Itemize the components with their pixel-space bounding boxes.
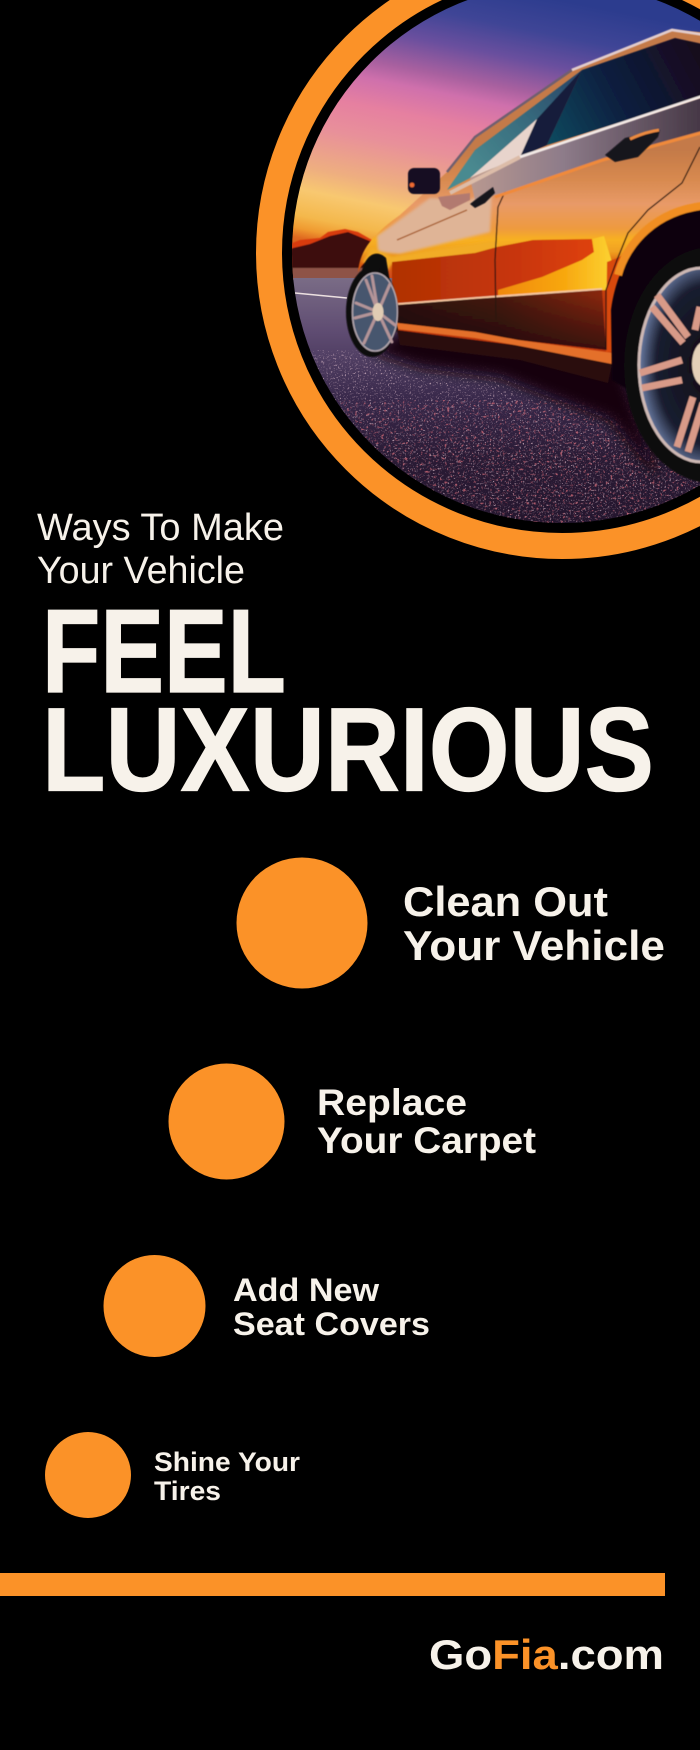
main title [42,585,654,816]
sky [280,0,700,280]
label 4: Shine Your [154,1447,301,1477]
photo: sports car at sunset [280,0,700,530]
label 2: Replace [317,1082,467,1123]
item 4: shine your tires [45,1432,301,1518]
sunset reflection red band [392,239,594,304]
rear wheel [611,205,700,483]
windows [447,30,700,193]
car body [358,30,700,410]
lower door panels [395,289,606,350]
door seams [494,195,504,316]
under-sill [397,330,612,383]
road line [295,293,347,298]
road [280,278,700,528]
intro heading: Ways To Make [37,507,284,549]
front wheel [346,254,398,357]
label 3: Add New [233,1272,379,1308]
yellow hood highlight [362,244,498,270]
label 3 [233,1272,430,1342]
circle 1 [236,858,368,988]
door handles [470,130,660,208]
hood sheen [377,190,492,254]
label 1 [403,878,665,969]
label 1: Your Vehicle [403,922,665,969]
label 2: Your Carpet [317,1120,536,1161]
footer bar [0,1573,665,1596]
upper panel [470,94,700,200]
footer logo: GoFia.com: GoFia.com [429,1631,664,1678]
photo ring: orange circle frame [269,0,700,546]
label 1: Clean Out [403,878,608,925]
horizon trees [292,228,372,279]
body crease line [398,289,602,304]
circle 4 [45,1432,131,1518]
yellow reflection [498,236,612,296]
circle 3 [104,1255,206,1357]
label 2 [317,1082,536,1161]
label 4: Tires [154,1476,221,1506]
car shadow [370,330,660,480]
side mirror [408,168,470,210]
item 2: replace your carpet [168,1064,536,1180]
asphalt specks [310,350,700,523]
label 4 [154,1447,301,1506]
shoulder highlight [495,130,700,197]
main title: FEEL [42,585,286,718]
item 1: clean out your vehicle [236,858,665,988]
intro heading: Your Vehicle [37,550,245,592]
rear quarter strip [606,256,622,352]
item 3: add new seat covers [104,1255,430,1357]
side sill [397,323,613,364]
circle 2 [168,1064,284,1180]
intro heading [37,507,284,592]
label 3: Seat Covers [233,1306,430,1342]
hood crease [397,210,467,240]
